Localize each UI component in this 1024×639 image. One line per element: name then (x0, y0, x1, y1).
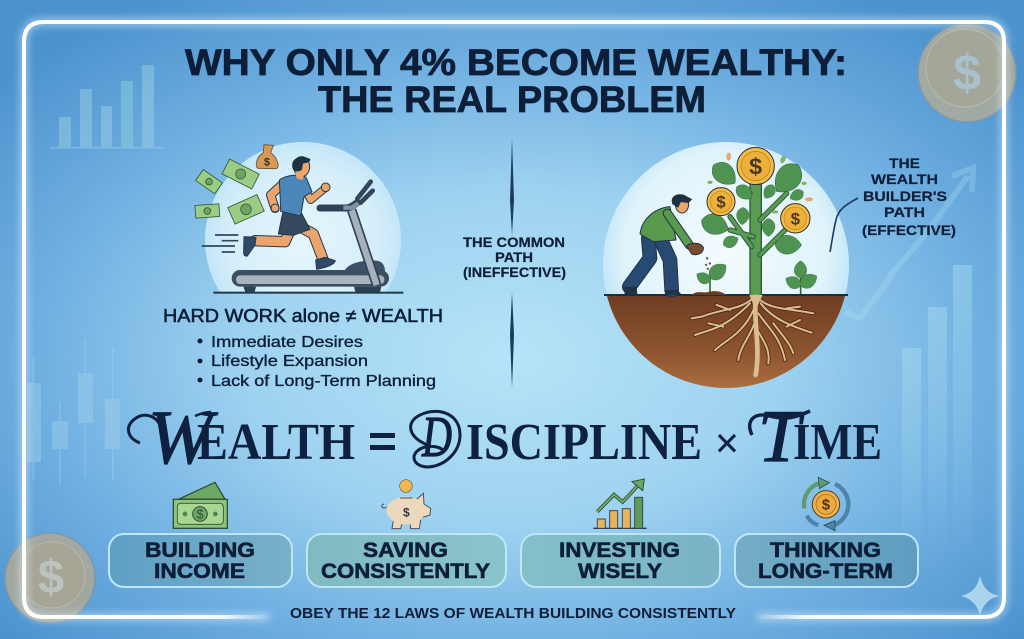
button: saving consistently (307, 534, 506, 587)
formula: wealth = discipline x time: W (148, 396, 219, 480)
formula: wealth = discipline x time: ISCIPLINE (466, 414, 702, 471)
speed lines (202, 235, 238, 252)
title: WHY ONLY 4% BECOME WEALTHY: (185, 42, 847, 83)
runner (244, 157, 335, 269)
coin dollar signs (716, 153, 801, 228)
money bag: $ (264, 156, 270, 168)
button: investing wisely (521, 534, 720, 587)
leaves (698, 157, 808, 254)
treadmill (213, 182, 403, 294)
center divider with label: PATH (495, 249, 533, 265)
formula: wealth = discipline x time: T (758, 396, 805, 478)
sparkle: bottom right (961, 576, 999, 615)
icon: cash (173, 482, 227, 528)
label: wealth builder's path with pointer: THE (889, 155, 920, 171)
formula: wealth = discipline x time: D (421, 404, 452, 469)
coin: top right (918, 24, 1016, 122)
button: investing wisely: INVESTING (559, 539, 680, 562)
coin dollar signs: $ (749, 153, 762, 179)
center divider with label (463, 138, 566, 388)
money coins (707, 147, 810, 233)
formula: wealth = discipline x time: × (714, 419, 740, 468)
button: saving consistently: CONSISTENTLY (321, 560, 490, 583)
title (185, 42, 847, 120)
label: wealth builder's path with pointer (830, 155, 956, 252)
small sprouts (692, 259, 820, 295)
money bag (256, 145, 278, 169)
illustration: man planting money tree (600, 142, 852, 395)
center divider with label: (INEFFECTIVE) (463, 264, 566, 280)
background rising arrow (845, 168, 973, 318)
coin: bottom left: $ (38, 550, 64, 603)
footer text: OBEY THE 12 LAWS OF WEALTH BUILDING CONSISTENTLY (290, 606, 736, 622)
label: wealth builder's path with pointer: BUILDER'S (863, 188, 947, 204)
icon: long-term cycle coin: $ (822, 498, 830, 514)
coin dollar signs: $ (791, 209, 801, 228)
center divider with label: THE COMMON (463, 234, 565, 250)
text block: hard work: Immediate Desires (211, 334, 363, 351)
button: building income: INCOME (154, 560, 245, 583)
tree trunk and branches (730, 183, 787, 295)
floating specks (707, 153, 813, 214)
coin: top right: $ (953, 45, 981, 101)
background bars: right (902, 265, 972, 558)
background candlesticks: left (27, 340, 120, 485)
button: thinking long-term (735, 534, 918, 587)
text block: hard work (163, 306, 443, 390)
gardener (623, 195, 703, 295)
coin: bottom left (5, 533, 95, 623)
icon: cash: $ (196, 508, 204, 522)
label: wealth builder's path with pointer: (EFFECTIVE) (862, 222, 956, 238)
button: investing wisely: WISELY (578, 560, 662, 583)
label: wealth builder's path with pointer: WEALTH (871, 171, 938, 187)
icon: long-term cycle coin (804, 477, 848, 531)
text block: hard work: Lack of Long-Term Planning (211, 373, 436, 390)
button: thinking long-term: LONG-TERM (758, 560, 893, 583)
button: building income (109, 534, 292, 587)
title: THE REAL PROBLEM (318, 79, 706, 120)
formula: wealth = discipline x time: IME (793, 414, 882, 471)
falling seeds (706, 257, 710, 270)
label: wealth builder's path with pointer: PATH (884, 204, 925, 220)
icon: growth chart (593, 479, 647, 528)
coin dollar signs: $ (716, 193, 726, 212)
icon: piggy bank (382, 480, 431, 529)
flying money (195, 159, 264, 224)
button: thinking long-term: THINKING (770, 539, 881, 562)
formula: wealth = discipline x time (128, 396, 882, 480)
text block: hard work: HARD WORK alone ≠ WEALTH (163, 306, 443, 326)
formula: wealth = discipline x time: EALTH (197, 414, 355, 471)
illustration: man running on treadmill (194, 142, 404, 294)
button: saving consistently: SAVING (363, 539, 448, 562)
background bar chart: top left (50, 65, 165, 148)
text block: hard work: Lifestyle Expansion (211, 353, 368, 370)
roots (692, 295, 813, 375)
icon: piggy bank: $ (403, 505, 410, 519)
button: building income: BUILDING (145, 539, 255, 562)
